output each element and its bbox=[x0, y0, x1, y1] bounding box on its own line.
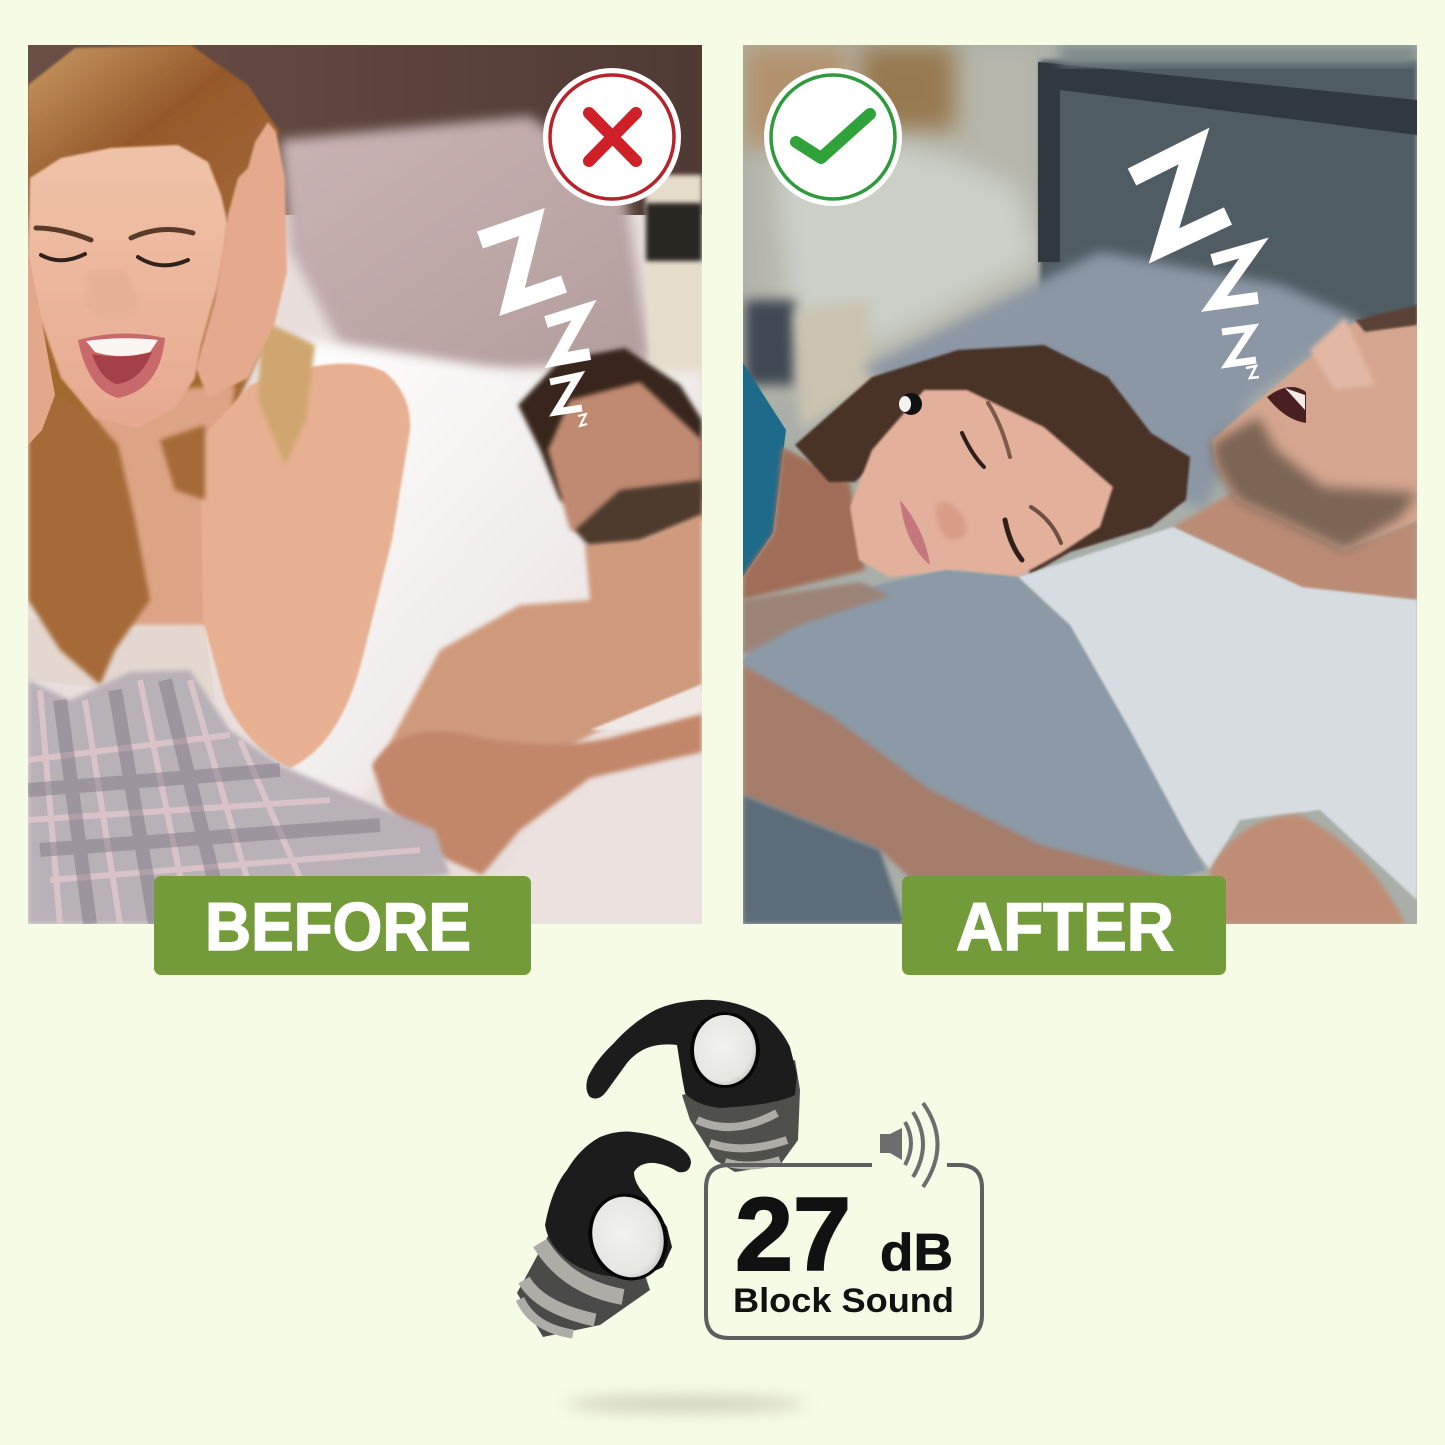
woman eyes and brows bbox=[962, 403, 1061, 560]
blurred room background bbox=[748, 50, 1036, 358]
woman arm and shoulder bbox=[200, 364, 410, 768]
hair top bbox=[28, 45, 278, 240]
man hair bbox=[1355, 305, 1417, 332]
woman lips bbox=[900, 500, 930, 565]
icon: green check badge bbox=[764, 68, 902, 206]
man neck bbox=[1173, 490, 1417, 600]
man mouth bbox=[1267, 387, 1306, 423]
icon: lower ear plug bbox=[517, 1132, 691, 1337]
woman hair bbox=[795, 345, 1190, 575]
label: after bbox=[902, 876, 1226, 975]
man head bbox=[1212, 308, 1417, 550]
eyes and brows bbox=[36, 228, 193, 265]
woman hand bbox=[743, 582, 890, 655]
ear plug in ear bbox=[899, 393, 922, 415]
white bedding bbox=[290, 340, 702, 800]
woman neck and chest bbox=[80, 385, 235, 625]
woman arm bbox=[743, 665, 1215, 924]
grey pillow bbox=[860, 252, 1360, 510]
white tee shirt bbox=[1018, 527, 1417, 900]
right background bbox=[645, 175, 702, 380]
man neck and chest bbox=[375, 515, 702, 770]
callout: 27 dB block sound: 27 bbox=[735, 1177, 851, 1293]
man nose bbox=[1310, 318, 1375, 390]
callout: 27 dB block sound: dB bbox=[880, 1224, 953, 1282]
panel: before photo bbox=[28, 45, 702, 924]
label: after: AFTER bbox=[956, 889, 1174, 965]
callout: 27 dB block sound: Block Sound bbox=[733, 1282, 954, 1320]
hair underlay bbox=[28, 45, 278, 480]
label: before bbox=[154, 876, 531, 975]
lower blanket bbox=[743, 795, 905, 924]
headboard bbox=[1040, 60, 1417, 320]
callout: 27 dB block sound bbox=[706, 1165, 982, 1338]
woman camisole bbox=[28, 618, 215, 700]
man forearm bbox=[1210, 815, 1405, 924]
sheet bbox=[500, 685, 702, 924]
man face bbox=[548, 382, 702, 545]
woman nose bbox=[936, 502, 967, 540]
icon: speaker sound waves bbox=[880, 1103, 938, 1187]
left hand bbox=[28, 250, 55, 445]
blue shirt bbox=[743, 363, 786, 577]
sheet fold over chest bbox=[590, 684, 702, 730]
open mouth bbox=[78, 333, 165, 398]
woman neck bbox=[743, 447, 865, 600]
man beard bbox=[1212, 417, 1417, 550]
headboard bbox=[28, 45, 702, 215]
hand to ear bbox=[196, 122, 287, 398]
pink pillow bbox=[280, 116, 650, 372]
zzz snore icon bbox=[480, 222, 590, 426]
blonde braid bbox=[258, 320, 315, 465]
face bbox=[28, 145, 228, 428]
woman face bbox=[850, 390, 1113, 577]
icon: upper ear plug bbox=[586, 1000, 800, 1172]
blanket bbox=[743, 570, 1205, 880]
zzz snore icon bbox=[1132, 146, 1259, 378]
pajama pants bbox=[28, 670, 450, 924]
hair lower bbox=[28, 380, 150, 685]
shadow under product bbox=[565, 1397, 805, 1411]
icon: red cross badge bbox=[543, 68, 681, 206]
man hair bbox=[518, 348, 702, 510]
panel: after photo bbox=[743, 45, 1417, 924]
nose shadow bbox=[85, 270, 140, 320]
man arm bbox=[372, 714, 702, 875]
label: before: BEFORE bbox=[205, 889, 471, 965]
